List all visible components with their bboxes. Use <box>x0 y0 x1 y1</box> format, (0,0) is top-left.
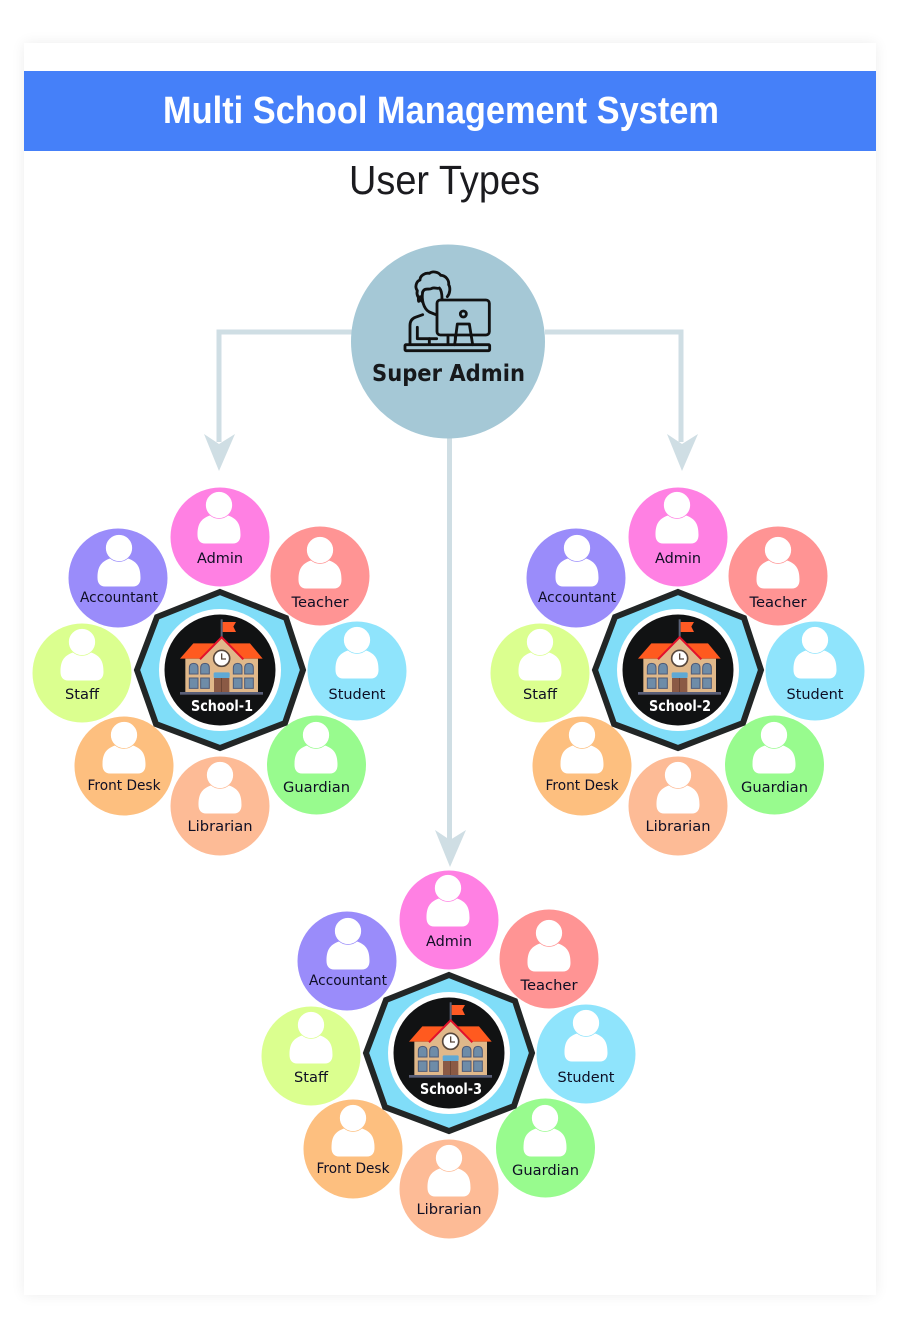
arrow: to School-2 <box>545 332 698 471</box>
school badge 2 <box>595 592 761 748</box>
role: Teacher <box>728 526 828 626</box>
role: Accountant <box>526 528 626 628</box>
role: Guardian: Guardian <box>283 780 350 796</box>
role: Staff: Staff <box>65 687 100 703</box>
role: Admin <box>170 488 270 586</box>
role: Guardian: Guardian <box>512 1163 579 1179</box>
role: Student <box>536 1004 636 1104</box>
header banner <box>24 71 876 151</box>
super admin node <box>351 244 545 438</box>
role: Front Desk <box>304 1100 402 1198</box>
role: Student <box>766 622 864 720</box>
role: Guardian <box>496 1098 595 1198</box>
role: Librarian: Librarian <box>188 819 252 835</box>
role: Librarian <box>400 1140 498 1238</box>
role: Admin: Admin <box>197 551 243 567</box>
school badge 1 <box>137 592 303 748</box>
role: Accountant <box>298 912 396 1010</box>
role: Guardian <box>267 716 366 814</box>
role: Accountant <box>68 528 168 628</box>
school badge 2: School-2 <box>649 697 711 715</box>
role: Student: Student <box>328 687 386 703</box>
role: Student: Student <box>558 1070 615 1086</box>
role: Librarian <box>170 756 270 856</box>
role: Staff: Staff <box>294 1070 329 1086</box>
role: Staff: Staff <box>523 687 558 703</box>
role: Staff <box>490 624 590 722</box>
cluster: School-3 <box>262 870 636 1238</box>
role: Admin: Admin <box>426 934 472 950</box>
role: Admin <box>400 870 498 970</box>
role: Admin <box>628 488 728 586</box>
role: Front Desk: Front Desk <box>316 1161 390 1177</box>
role: Guardian <box>725 716 824 814</box>
school badge 3 <box>366 975 532 1131</box>
role: Front Desk: Front Desk <box>546 778 619 794</box>
subtitle: User Types <box>349 157 540 203</box>
role: Teacher <box>270 526 370 626</box>
role: Staff <box>262 1006 360 1106</box>
role: Staff <box>32 624 132 722</box>
cluster: School-2 <box>490 488 864 856</box>
role: Front Desk <box>74 716 174 816</box>
school badge 1: School-1 <box>191 697 253 715</box>
arrow: to School-3 <box>435 438 466 867</box>
role: Teacher: Teacher <box>290 595 349 611</box>
role: Teacher: Teacher <box>519 978 578 994</box>
role: Librarian: Librarian <box>646 819 710 835</box>
title: Multi School Management System <box>163 90 719 132</box>
role: Teacher: Teacher <box>748 595 807 611</box>
role: Admin: Admin <box>655 551 701 567</box>
role: Student: Student <box>786 687 844 703</box>
role: Accountant: Accountant <box>538 590 616 606</box>
role: Librarian <box>628 756 728 856</box>
cluster: School-1 <box>32 488 406 856</box>
label: Super Admin <box>372 361 525 387</box>
arrow: to School-1 <box>204 332 352 471</box>
icon: person at computer <box>405 272 490 351</box>
role: Guardian: Guardian <box>741 780 808 796</box>
role: Librarian: Librarian <box>416 1202 482 1218</box>
role: Accountant: Accountant <box>80 590 158 606</box>
role: Front Desk: Front Desk <box>88 778 161 794</box>
role: Accountant: Accountant <box>309 973 387 989</box>
school badge 3: School-3 <box>420 1080 482 1098</box>
role: Student <box>308 622 406 720</box>
role: Teacher <box>500 910 598 1008</box>
role: Front Desk <box>532 716 632 816</box>
